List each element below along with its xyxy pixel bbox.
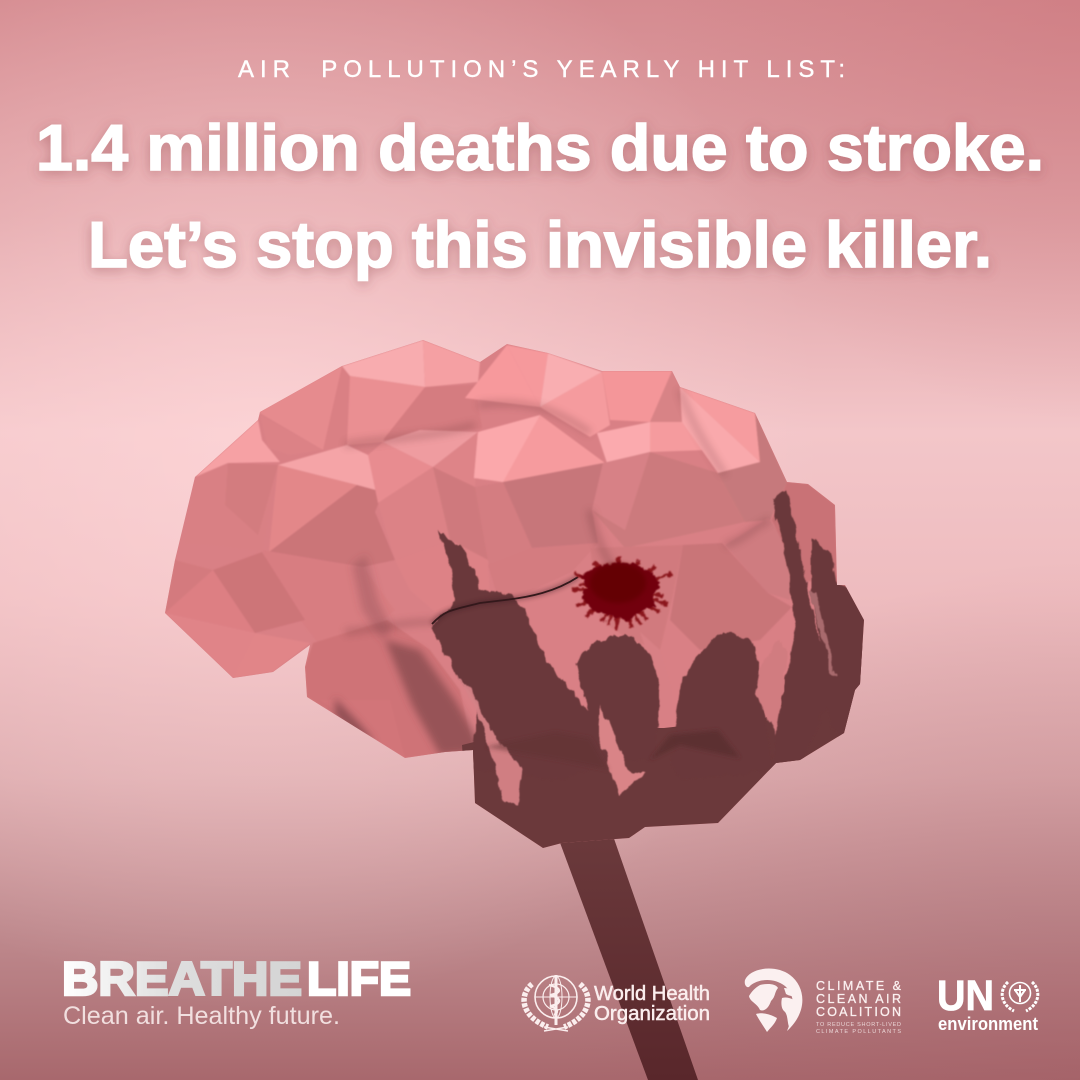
logo: World Health Organization: Organization (594, 1002, 710, 1025)
logo: Climate and Clean Air Coalition: COALITION (816, 1005, 901, 1019)
facets of the brain surface (165, 340, 837, 758)
logo: BreatheLife: Clean air. Healthy future. (63, 1002, 340, 1030)
logo: UN environment: UN (937, 972, 994, 1020)
logo: UN environment: environment (938, 1014, 1038, 1034)
main headline: 1.4 million deaths due to stroke. (36, 111, 1044, 184)
cerebellum facets (485, 730, 740, 770)
smoke: dark pollution over lower brain (431, 490, 875, 860)
logo: Climate and Clean Air Coalition (745, 969, 902, 1035)
pale streaks through the smoke (456, 590, 836, 806)
brain stem (559, 830, 698, 1080)
lobe crease shadows (345, 390, 770, 632)
logo: World Health Organization: World Health (594, 982, 710, 1005)
logo: Climate and Clean Air Coalition: TO REDUCE SHORT-LIVED (816, 1022, 901, 1028)
blood clot: stroke (572, 557, 672, 630)
logo: BreatheLife (62, 952, 411, 1030)
logo: BreatheLife: BREATHE (62, 952, 302, 1005)
logo: Climate and Clean Air Coalition: CLEAN AIR (816, 992, 901, 1006)
main headline (36, 111, 1044, 281)
logo: UN environment (937, 972, 1038, 1034)
low-poly brain illustration (150, 330, 880, 860)
icon: UN environment emblem (1002, 982, 1038, 1011)
logo: World Health Organization (524, 975, 710, 1031)
logo: Climate and Clean Air Coalition: CLIMATE POLLUTANTS (816, 1029, 901, 1035)
logo: Climate and Clean Air Coalition: CLIMATE & (816, 979, 902, 993)
logo: BreatheLife: LIFE (307, 952, 411, 1005)
crack (432, 577, 578, 624)
small heading: AIR POLLUTION’S YEARLY HIT LIST: (238, 56, 845, 83)
cerebellum solid dark mass (462, 640, 870, 860)
smoke: soft faint streaks on the left (335, 555, 485, 755)
icon: CCAC globe and crescent (745, 969, 802, 1032)
main headline: Let’s stop this invisible killer. (88, 208, 992, 281)
icon: WHO emblem (524, 975, 588, 1031)
